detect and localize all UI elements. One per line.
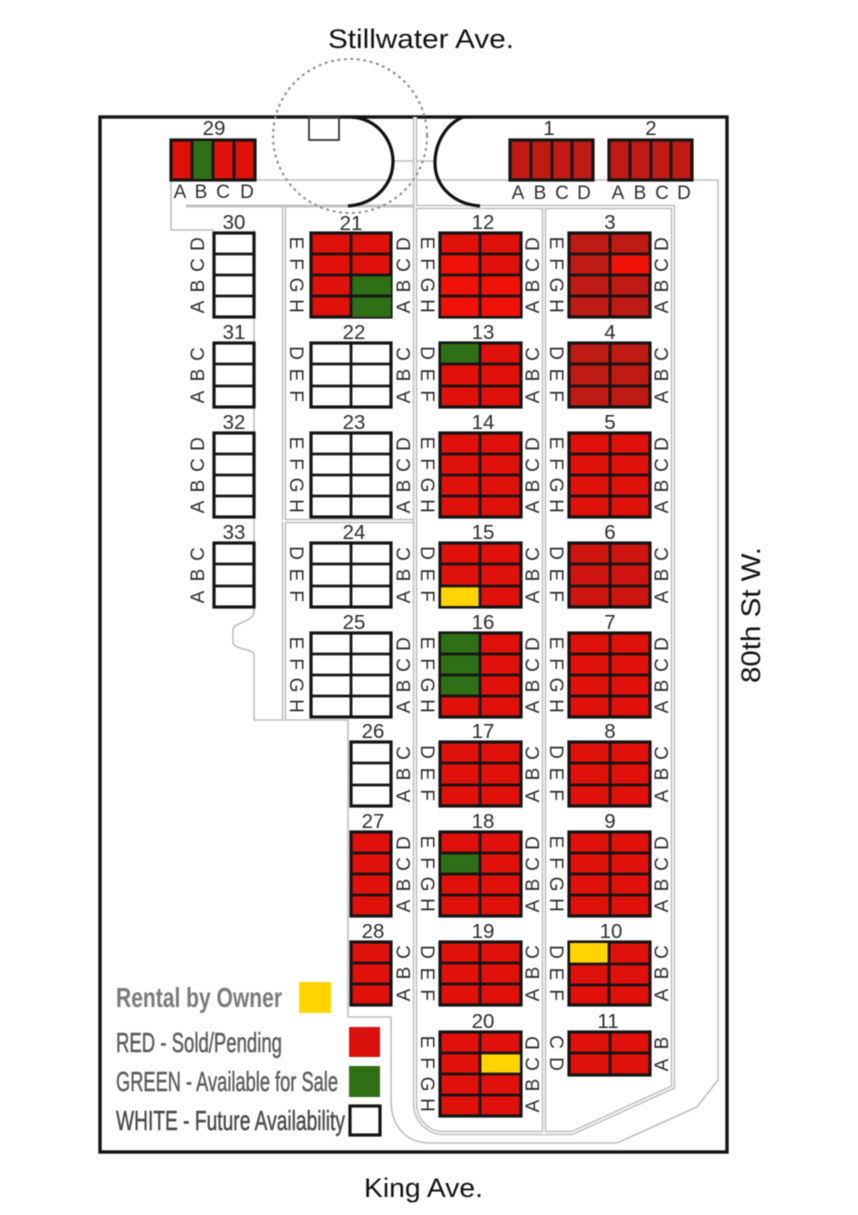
- block 13: 13: [472, 321, 494, 344]
- block 12: 12: [472, 211, 494, 234]
- block 11: [545, 1010, 673, 1075]
- block 9: EFGH: [545, 836, 566, 912]
- block 19: ABC: [523, 945, 544, 1001]
- block 1: [510, 117, 593, 204]
- block 5: [545, 411, 673, 517]
- block 16: ABCD: [523, 637, 544, 713]
- block 11: AB: [652, 1037, 673, 1071]
- block 29: 29: [203, 117, 225, 140]
- block 10: ABC: [652, 945, 673, 1001]
- block 22: DEF: [285, 346, 306, 402]
- block 32: ABCD: [188, 437, 209, 513]
- block 8: 8: [604, 720, 616, 743]
- block 6: 6: [604, 521, 616, 544]
- block 12: ABCD: [523, 237, 544, 313]
- block 21: ABCD: [394, 237, 415, 313]
- block 18: [416, 810, 544, 916]
- block 26: 26: [362, 720, 384, 743]
- block 15: ABC: [523, 547, 544, 603]
- block 32: 32: [223, 411, 245, 434]
- block 3: 3: [604, 211, 616, 234]
- block 21: [285, 212, 415, 317]
- block 16: [416, 611, 544, 717]
- block 3: EFGH: [545, 237, 566, 313]
- block 15: 15: [472, 521, 494, 544]
- street label: Stillwater Ave.: Stillwater Ave.: [328, 24, 514, 54]
- block 21: 21: [340, 212, 362, 235]
- block 18: ABCD: [523, 836, 544, 912]
- block 6: DEF: [545, 546, 566, 602]
- block 30: ABCD: [188, 237, 209, 313]
- block 18: 18: [472, 810, 494, 833]
- block 14: EFGH: [416, 437, 437, 513]
- street label: King Ave.: King Ave.: [364, 1173, 483, 1203]
- block 31: ABC: [188, 347, 209, 403]
- block 24: ABC: [394, 547, 415, 603]
- block 28: ABC: [394, 945, 415, 1001]
- block 33: 33: [223, 521, 245, 544]
- block 24: [285, 521, 415, 607]
- road network: [171, 117, 718, 1143]
- block 29: [171, 117, 255, 203]
- dotted circle: entrance area: [273, 59, 427, 213]
- block 13: DEF: [416, 346, 437, 402]
- left entrance arc: [348, 117, 393, 206]
- block 14: 14: [472, 411, 494, 434]
- block 8: [545, 720, 673, 806]
- block 19: [416, 920, 544, 1005]
- block 22: [285, 321, 415, 407]
- block 25: [285, 611, 415, 717]
- block 25: 25: [343, 611, 365, 634]
- block 20: 20: [472, 1010, 494, 1033]
- block 16: 16: [472, 611, 494, 634]
- block 13: ABC: [523, 347, 544, 403]
- block 11: 11: [597, 1010, 619, 1033]
- legend: sold or pending: RED - Sold/Pending: [116, 1027, 282, 1058]
- block 30: 30: [223, 211, 245, 234]
- block 20: ABCD: [523, 1036, 544, 1112]
- block 19: DEF: [416, 945, 437, 1001]
- block 17: ABC: [523, 746, 544, 802]
- block 26: ABC: [394, 746, 415, 802]
- block 30: [188, 211, 254, 317]
- block 17: DEF: [416, 745, 437, 801]
- block 24: 24: [343, 521, 365, 544]
- block 6: [545, 521, 673, 607]
- block 18: EFGH: [416, 836, 437, 912]
- block 21: EFGH: [285, 237, 306, 313]
- block 14: [416, 411, 544, 517]
- block 13: [416, 321, 544, 407]
- block 24: DEF: [285, 546, 306, 602]
- entrance building: [309, 117, 339, 140]
- block 10: [545, 920, 673, 1005]
- block 5: 5: [604, 411, 616, 434]
- block 23: [285, 411, 415, 517]
- block 4: ABC: [652, 347, 673, 403]
- block 4: DEF: [545, 346, 566, 402]
- block 22: 22: [343, 321, 365, 344]
- block 28: [351, 920, 415, 1005]
- block 14: ABCD: [523, 437, 544, 513]
- block 23: ABCD: [394, 437, 415, 513]
- block 8: DEF: [545, 745, 566, 801]
- block 5: ABCD: [652, 437, 673, 513]
- block 33: [188, 521, 254, 607]
- block 27: ABCD: [394, 836, 415, 912]
- block 19: 19: [472, 920, 494, 943]
- block 7: EFGH: [545, 637, 566, 713]
- block 31: 31: [223, 321, 245, 344]
- block 9: 9: [604, 810, 616, 833]
- block 26: [351, 720, 415, 806]
- block 7: ABCD: [652, 637, 673, 713]
- block 3: [545, 211, 673, 317]
- block 2: [609, 117, 692, 204]
- block 9: [545, 810, 673, 916]
- block 25: ABCD: [394, 637, 415, 713]
- block 16: EFGH: [416, 637, 437, 713]
- block 15: [416, 521, 544, 607]
- block 23: EFGH: [285, 437, 306, 513]
- block 22: ABC: [394, 347, 415, 403]
- block 28: 28: [362, 920, 384, 943]
- block 10: 10: [600, 920, 622, 943]
- block 6: ABC: [652, 547, 673, 603]
- block 7: 7: [604, 611, 616, 634]
- block 20: [416, 1010, 544, 1116]
- property boundary: [100, 117, 727, 1152]
- block 20: EFGH: [416, 1036, 437, 1112]
- block 25: EFGH: [285, 637, 306, 713]
- block 17: 17: [472, 720, 494, 743]
- block 1: 1: [543, 117, 555, 140]
- block 1: ABCD: [512, 183, 591, 204]
- block 33: ABC: [188, 547, 209, 603]
- block 27: [351, 810, 415, 916]
- block 17: [416, 720, 544, 806]
- block 4: 4: [604, 321, 616, 344]
- legend: future availability: WHITE - Future Availability: [116, 1105, 345, 1136]
- legend: rental by owner: Rental by Owner: [116, 982, 282, 1013]
- block 7: [545, 611, 673, 717]
- block 27: 27: [362, 810, 384, 833]
- block 5: EFGH: [545, 437, 566, 513]
- block 3: ABCD: [652, 237, 673, 313]
- block 10: DEF: [545, 945, 566, 1001]
- block 23: 23: [343, 411, 365, 434]
- block 29: ABCD: [174, 182, 254, 203]
- block 15: DEF: [416, 546, 437, 602]
- block 32: [188, 411, 254, 517]
- legend: [116, 982, 380, 1136]
- block 2: 2: [645, 117, 657, 140]
- block 12: [416, 211, 544, 317]
- right entrance arc: [435, 117, 480, 206]
- block 8: ABC: [652, 746, 673, 802]
- block 4: [545, 321, 673, 407]
- block 12: EFGH: [416, 237, 437, 313]
- block 9: ABCD: [652, 836, 673, 912]
- block 31: [188, 321, 254, 407]
- legend: available for sale: GREEN - Available for Sale: [116, 1066, 338, 1097]
- street label: 80th St W.: 80th St W.: [736, 547, 766, 683]
- block 2: ABCD: [612, 183, 691, 204]
- block 11: CD: [545, 1035, 566, 1071]
